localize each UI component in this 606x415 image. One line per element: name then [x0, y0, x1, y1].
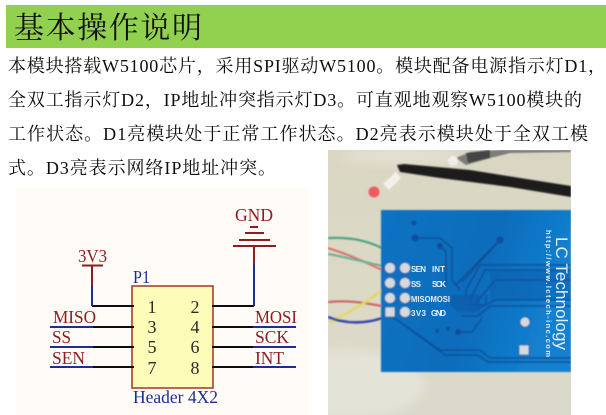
board brand text: [544, 230, 571, 357]
wires: [50, 227, 296, 367]
pen: [397, 164, 571, 197]
net labels: SCK: [255, 327, 289, 347]
designator P1: P1: [133, 267, 150, 287]
wires: [328, 238, 382, 322]
power labels: 3V3: [78, 246, 107, 266]
title banner: [6, 5, 606, 48]
pin numbers: 7: [148, 358, 156, 378]
silkscreen labels: 3V3: [411, 309, 427, 318]
description text block: 本模块搭载W5100芯片，采用SPI驱动W5100。模块配备电源指示灯D1，: [8, 56, 606, 76]
board brand text: LC Technology: [552, 237, 571, 350]
silkscreen labels: SS: [411, 280, 422, 289]
pin numbers: 3: [148, 317, 156, 337]
component name: Header 4X2: [133, 387, 218, 407]
net labels: INT: [255, 348, 284, 368]
net labels: MISO: [53, 307, 96, 327]
silkscreen labels: [411, 265, 450, 318]
description text block: 全双工指示灯D2，IP地址冲突指示灯D3。可直观地观察W5100模块的: [8, 90, 582, 110]
net labels: MOSI: [255, 307, 297, 327]
silkscreen labels: SEN: [411, 265, 426, 274]
board brand text: http://www.lctech-inc.com: [544, 230, 553, 357]
via points: [412, 220, 504, 335]
pin numbers: 5: [148, 337, 156, 357]
LED: [383, 172, 401, 190]
silkscreen labels: MISOMOSI: [411, 295, 450, 304]
net labels: SS: [52, 327, 71, 347]
pin numbers: 4: [190, 317, 200, 337]
pin numbers: 6: [190, 337, 200, 357]
title: 基本操作说明: [14, 12, 202, 45]
net labels: SEN: [52, 348, 85, 368]
pin numbers: [148, 297, 200, 378]
photo: W5100 module back: [265, 145, 571, 415]
silkscreen labels: SCK: [432, 280, 446, 289]
pin numbers: 8: [190, 358, 200, 378]
traces: [390, 238, 571, 362]
pin numbers: 2: [190, 297, 200, 317]
panel: connector schematic: GND: [235, 205, 273, 225]
header pads: [384, 262, 530, 355]
net labels: [52, 307, 297, 368]
description text block: 工作状态。D1亮模块处于正常工作状态。D2亮表示模块处于全双工模: [8, 124, 588, 144]
silkscreen labels: GND: [431, 309, 446, 318]
description text block: 式。D3亮表示网络IP地址冲突。: [8, 158, 276, 178]
cable top: [456, 150, 571, 165]
pin numbers: 1: [148, 297, 156, 317]
pcb board: [381, 210, 571, 372]
silkscreen labels: INT: [432, 265, 445, 274]
panel: connector schematic: [16, 188, 308, 415]
connector body P1: [132, 286, 213, 388]
description text block: [8, 56, 606, 178]
